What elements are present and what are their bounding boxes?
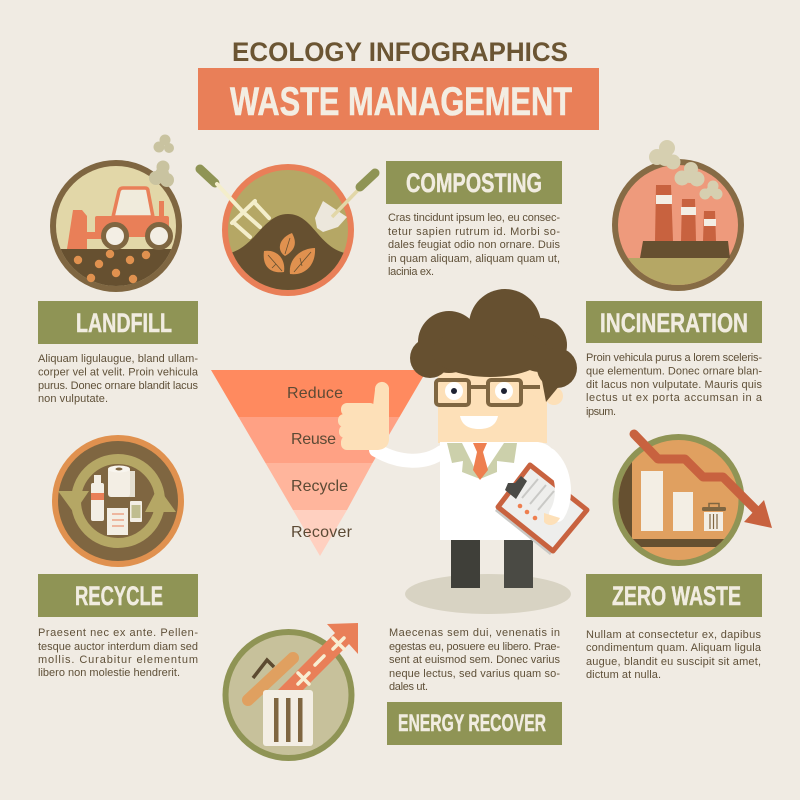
pyramid: waste hierarchy: Reduce [287, 385, 343, 402]
text: energy recover: neque lectus, sed varius quam so- [389, 668, 560, 680]
text: composting: tetur sapien rutrum id. Morbi so- [388, 226, 560, 238]
label: landfill [38, 301, 198, 344]
text: composting: lacinia ex. [388, 266, 434, 278]
banner: waste management [198, 68, 599, 130]
text: energy recover: Maecenas sem dui, venenatis in [389, 627, 560, 639]
icon: composting [200, 164, 375, 300]
icon: landfill bulldozer [50, 134, 182, 299]
character: scientist [338, 289, 587, 614]
text: energy recover: sent at euismod sem. Donec varius [389, 654, 560, 666]
text: zero waste: augue, blandit eu suscipit sit amet, [586, 656, 761, 668]
text: incineration [586, 352, 763, 418]
label: zero waste [586, 574, 762, 617]
text: composting: Cras tincidunt ipsum leo, eu consec- [388, 212, 560, 224]
text: incineration: ipsum. [586, 406, 616, 418]
pyramid: waste hierarchy: Recycle [291, 478, 348, 495]
text: recycle: Praesent nec ex ante. Pellen- [38, 627, 198, 639]
icon: energy recover bin [222, 623, 358, 761]
icon: recycle [52, 435, 184, 567]
text: zero waste: Nullam at consectetur ex, dapibus [586, 629, 762, 641]
text: composting [388, 212, 560, 278]
text: recycle: mollis. Curabitur elementum [38, 654, 198, 666]
label: recycle [38, 574, 198, 617]
text: energy recover [389, 627, 560, 693]
text: zero waste: condimentum quam. Aliquam ligula [586, 642, 762, 654]
text: composting: dales feugiat odio non ornare. Duis [388, 239, 560, 251]
label: incineration: INCINERATION [600, 308, 748, 338]
text: zero waste [586, 629, 762, 681]
text: incineration: dit lacus non vulputate. Mauris quis [586, 379, 762, 391]
text: landfill: corper vel at velit. Proin vehicula [38, 366, 199, 378]
label: recycle: RECYCLE [75, 581, 163, 611]
text: landfill: Aliquam ligulaugue, bland ullam- [38, 353, 198, 365]
text: incineration: que elementum. Donec ornare blan- [586, 366, 762, 378]
pyramid: waste hierarchy [211, 370, 427, 556]
label: composting [386, 161, 562, 204]
label: zero waste: ZERO WASTE [612, 581, 741, 611]
text: landfill [38, 353, 199, 405]
text: recycle: tesque auctor interdum diam sed [38, 641, 198, 653]
text: energy recover: egestas eu, posuere eu libero. Prae- [389, 641, 560, 653]
title: ECOLOGY INFOGRAPHICS [232, 37, 568, 67]
label: energy recover: ENERGY RECOVER [398, 710, 546, 737]
label: incineration [586, 301, 762, 343]
text: composting: in quam aliquam, aliquam quam ut, [388, 253, 560, 265]
banner: waste management: WASTE MANAGEMENT [230, 80, 572, 124]
text: zero waste: dictum at nulla. [586, 669, 661, 681]
icon: incineration factory [610, 140, 746, 298]
icon: zero waste chart [612, 434, 772, 566]
label: landfill: LANDFILL [76, 308, 172, 338]
text: incineration: Proin vehicula purus a lorem sceleris- [586, 352, 762, 364]
text: landfill: purus. Donec ornare blandit lacus [38, 380, 198, 392]
text: energy recover: dales ut. [389, 681, 428, 693]
text: incineration: lectus ut ex porta accumsan in a [586, 392, 763, 404]
pyramid: waste hierarchy: Reuse [291, 431, 336, 448]
label: energy recover [387, 702, 562, 745]
pyramid: waste hierarchy: Recover [291, 524, 353, 541]
text: landfill: non vulputate. [38, 393, 108, 405]
text: recycle [38, 627, 198, 679]
label: composting: COMPOSTING [406, 168, 542, 198]
text: recycle: libero non molestie hendrerit. [38, 667, 180, 679]
